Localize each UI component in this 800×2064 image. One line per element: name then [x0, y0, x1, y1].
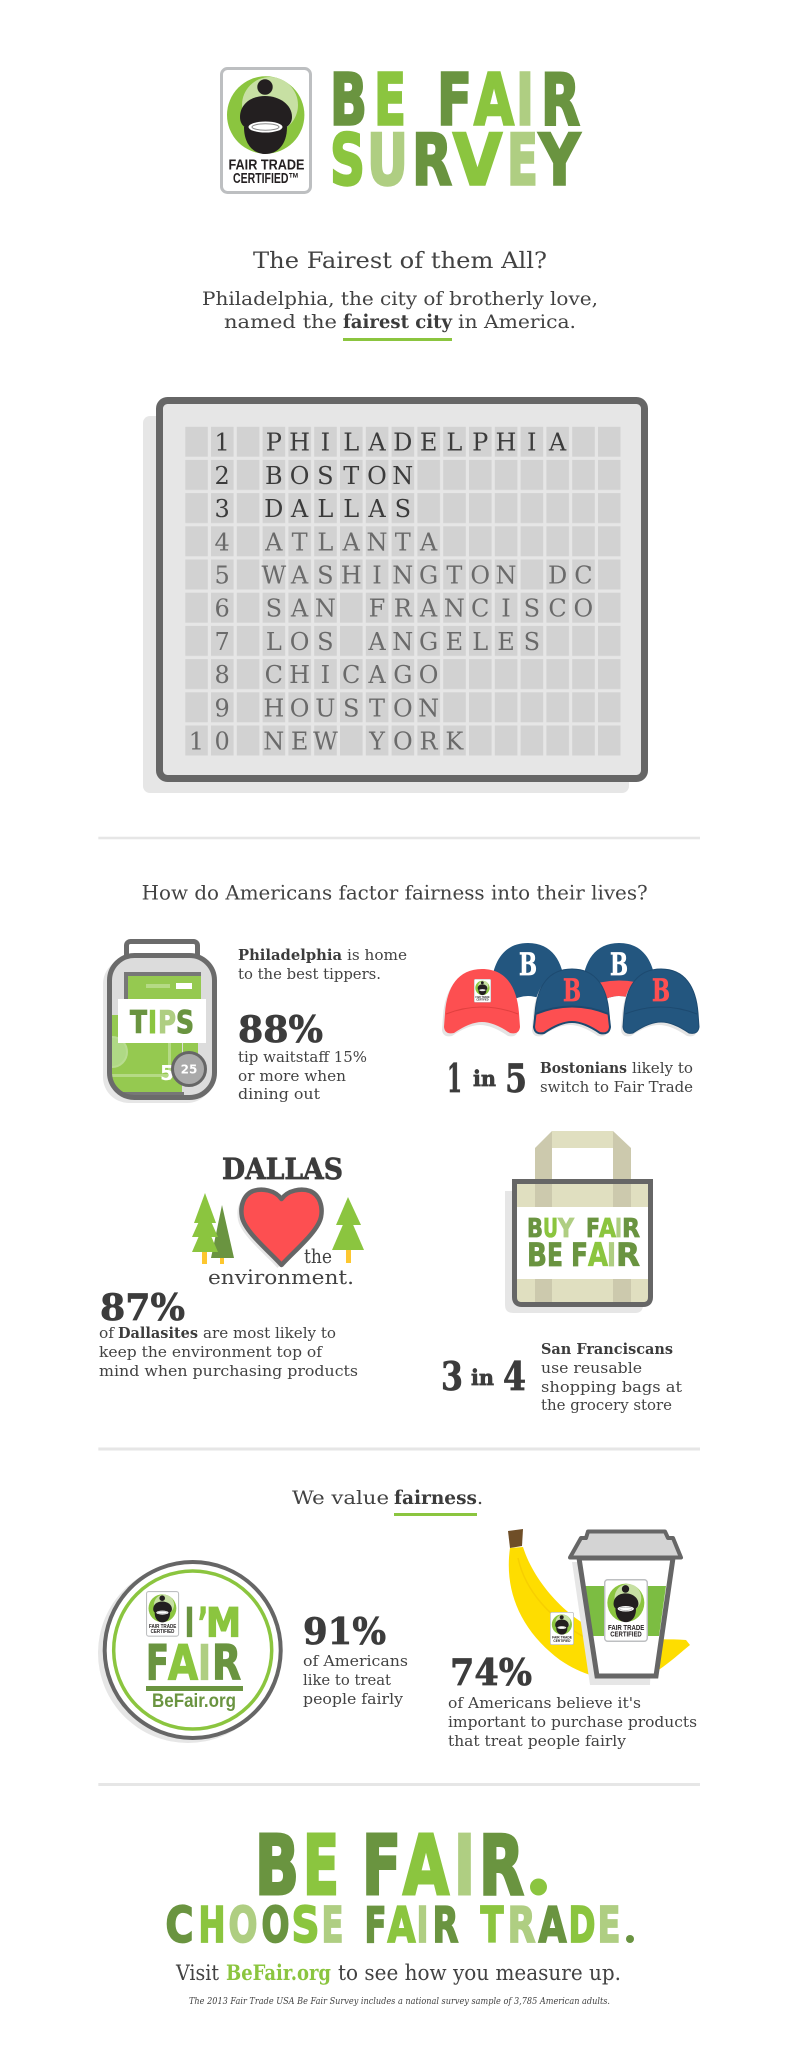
board rows: SAN FRANCISCO — [266, 595, 593, 623]
text: Philadelphia best tippers: to the best tippers. — [238, 965, 381, 983]
icon: tip jar: S — [176, 1005, 194, 1041]
heading: We value fairness: fairness — [394, 1487, 477, 1509]
text: of Americans like to treat — [303, 1652, 408, 1708]
panel: city ranking board — [143, 400, 644, 793]
board rows: 8 — [215, 661, 230, 689]
board rows: PHILADELPHIA — [266, 429, 567, 457]
slogan: Choose Fair Trade: I — [416, 1897, 428, 1954]
bag lettering: F — [571, 1236, 588, 1274]
text: Visit BeFair.org: to see how you measure up. — [338, 1961, 621, 1985]
bag lettering: E — [547, 1236, 563, 1274]
slogan: Choose Fair Trade: T — [480, 1897, 504, 1954]
logo: Fair Trade Certified: FAIR TRADE — [228, 158, 305, 174]
board rows: DALLAS — [264, 495, 411, 523]
heading: The Fairest of them All?: The Fairest of them All? — [253, 249, 547, 274]
bag lettering: Y — [557, 1214, 574, 1244]
slogan: Choose Fair Trade: R — [508, 1897, 536, 1954]
slogan: Choose Fair Trade: O — [228, 1897, 258, 1954]
text: of Americans like to treat: like to treat — [303, 1671, 391, 1689]
heading: We value fairness: . — [477, 1487, 483, 1509]
text: Philadelphia fairest city: in America. — [458, 311, 576, 333]
title: Be Fair Survey: B — [330, 58, 367, 142]
icon: baseball caps: B — [610, 947, 628, 983]
stat: 1 in 5: 1 — [447, 1056, 462, 1102]
text: of Americans believe — [448, 1694, 697, 1750]
text: of Americans believe: that treat people fairly — [448, 1732, 627, 1750]
text: Visit BeFair.org: Visit — [175, 1961, 220, 1985]
board rows — [189, 429, 593, 756]
text: San Franciscans — [541, 1340, 682, 1414]
text: Philadelphia fairest city: named the — [224, 311, 337, 333]
bag lettering: B — [527, 1236, 547, 1274]
icon: coffee cup: FAIR TRADE — [608, 1625, 645, 1632]
slogan: Be Fair: R — [479, 1819, 524, 1914]
heading: Dallas: DALLAS — [222, 1152, 343, 1186]
text: San Franciscans: San Franciscans — [541, 1340, 673, 1358]
board rows: 3 — [215, 495, 230, 523]
board rows: NEW YORK — [263, 728, 464, 756]
title: Be Fair Survey: A — [474, 58, 514, 142]
slogan: Be Fair: A — [403, 1819, 449, 1914]
heading: How do Americans factor fairness: How do Americans factor fairness into their lives? — [142, 881, 648, 904]
text: San Franciscans: the grocery store — [541, 1396, 672, 1414]
bag lettering: R — [622, 1214, 640, 1244]
stat: 3 in 4: 4 — [503, 1354, 526, 1400]
title: Be Fair Survey: V — [453, 120, 502, 202]
heading: We value fairness: We value — [292, 1487, 389, 1509]
stat: 1 in 5: 5 — [505, 1056, 527, 1102]
stat: 88%: 88% — [238, 1009, 323, 1051]
icon: I'm Fair badge: M — [206, 1600, 241, 1646]
icon: tip jar — [97, 942, 214, 1103]
text: Dallasites: of — [99, 1324, 115, 1342]
text: San Franciscans: use reusable — [541, 1359, 642, 1377]
icon: heart — [237, 1190, 322, 1268]
stat: 3 in 4: 3 — [441, 1354, 463, 1400]
text: Philadelphia best tippers — [238, 946, 407, 983]
board rows: CHICAGO — [265, 661, 438, 689]
footnote: The 2013 Fair Trade USA Be Fair Survey includes a national survey sample of 3,785 American adults. — [189, 1997, 610, 2007]
title: Be Fair Survey: E — [374, 58, 406, 142]
stat: 87%: 87% — [100, 1287, 185, 1329]
board rows: 9 — [215, 694, 230, 722]
slogan: Choose Fair Trade: F — [364, 1897, 386, 1954]
text: Bostonians — [540, 1059, 693, 1096]
slogan: Choose Fair Trade: A — [538, 1897, 567, 1954]
text: Visit BeFair.org: BeFair.org — [226, 1960, 331, 1985]
slogan: Be Fair: B — [255, 1819, 299, 1914]
stat: 91%: 91% — [303, 1611, 386, 1653]
text: of Americans like to treat: of Americans — [303, 1652, 408, 1670]
title: Be Fair Survey: E — [507, 120, 538, 202]
text: Dallasites: are most likely to — [203, 1324, 336, 1342]
text: Dallasites: Dallasites — [118, 1324, 198, 1342]
text: Dallasites: keep the environment top of — [99, 1343, 323, 1361]
stat: 1 in 5 — [447, 1056, 527, 1102]
board rows: 6 — [215, 595, 230, 623]
bag lettering: A — [599, 1214, 616, 1244]
title: Be Fair Survey: S — [330, 120, 365, 202]
icon: I'm Fair badge: I — [198, 1636, 211, 1692]
slogan: Choose Fair Trade: E — [598, 1897, 620, 1954]
icon: coffee cup: CERTIFIED — [610, 1631, 642, 1639]
slogan: Choose Fair Trade: O — [262, 1897, 290, 1954]
stat: 3 in 4 — [441, 1354, 526, 1400]
text: the environment: environment. — [208, 1265, 354, 1289]
icon: I'm Fair badge: I — [185, 1600, 194, 1646]
slogan: Choose Fair Trade: A — [388, 1897, 416, 1954]
text: Bostonians: likely to — [632, 1059, 693, 1077]
slogan: Be Fair: I — [454, 1819, 475, 1914]
title: Be Fair Survey: R — [541, 58, 580, 142]
text: the environment — [208, 1244, 354, 1289]
slogan: Choose Fair Trade: C — [166, 1897, 194, 1954]
icon: banana — [508, 1529, 690, 1680]
bag lettering: R — [616, 1236, 640, 1274]
board rows: ATLANTA — [264, 528, 438, 556]
text: tip waitstaff — [238, 1048, 367, 1103]
icon: I'm Fair badge: R — [212, 1636, 241, 1692]
icon: tip jar: 5 — [160, 1061, 174, 1085]
text: Philadelphia fairest city — [202, 288, 598, 341]
text: Bostonians: Bostonians — [540, 1059, 627, 1077]
icon: baseball caps: B — [652, 973, 670, 1009]
board rows: 7 — [215, 628, 230, 656]
icon: banana: CERTIFIED — [553, 1639, 571, 1643]
icon: tip jar: 25 — [181, 1062, 197, 1076]
title: Be Fair Survey — [330, 58, 581, 202]
bag lettering: A — [588, 1236, 608, 1274]
slogan: Be Fair: F — [362, 1819, 401, 1914]
icon: baseball caps — [442, 943, 699, 1036]
logo: Fair Trade Certified: CERTIFIED™ — [233, 171, 299, 187]
stat: 1 in 5: in — [473, 1066, 496, 1091]
text: the environment: the — [304, 1244, 332, 1268]
text: San Franciscans: shopping bags at — [541, 1378, 682, 1396]
slogan: Choose Fair Trade: E — [322, 1897, 344, 1954]
title: Be Fair Survey: I — [516, 58, 534, 142]
text: tip waitstaff: dining out — [238, 1085, 320, 1103]
bag lettering — [527, 1214, 640, 1274]
stat: 74%: 74% — [450, 1652, 532, 1694]
title: Be Fair Survey: U — [367, 120, 408, 202]
bag lettering: B — [527, 1214, 543, 1244]
text: of Americans believe: of Americans believe it's — [448, 1694, 641, 1712]
icon: I'm Fair badge — [98, 1562, 281, 1743]
icon: I'm Fair badge: F — [146, 1636, 169, 1692]
icon: banana: FAIR TRADE — [552, 1636, 572, 1640]
text: Philadelphia best tippers: is home — [347, 946, 407, 964]
board rows: 2 — [215, 462, 230, 490]
slogan: Choose Fair Trade: S — [292, 1897, 320, 1954]
bag lettering: I — [615, 1214, 622, 1244]
slogan: Choose Fair Trade — [166, 1897, 634, 1954]
icon: tote bag — [505, 1131, 650, 1313]
icon: I'm Fair badge: CERTIFIED — [151, 1629, 175, 1635]
board rows: WASHINGTON DC — [261, 562, 593, 590]
title: Be Fair Survey: Y — [538, 120, 581, 202]
slogan: Choose Fair Trade: R — [432, 1897, 458, 1954]
icon: tip jar: P — [158, 1005, 176, 1041]
title: Be Fair Survey: F — [437, 58, 472, 142]
icon: I'm Fair badge: A — [168, 1636, 198, 1692]
board rows: HOUSTON — [263, 694, 439, 722]
text: Dallasites: mind when purchasing products — [99, 1362, 358, 1380]
bag lettering: I — [607, 1236, 616, 1274]
text: Philadelphia fairest city: Philadelphia, the city of brotherly love, — [202, 288, 598, 310]
board rows: 4 — [215, 528, 230, 556]
slogan: Be Fair — [255, 1819, 547, 1914]
heading: We value fairness — [292, 1487, 483, 1516]
icon: baseball caps: CERTIFIED — [476, 997, 489, 1001]
board rows: 1 — [215, 429, 230, 457]
icon: baseball caps: B — [563, 973, 581, 1009]
text: tip waitstaff: tip waitstaff 15% — [238, 1048, 367, 1066]
icon: tip jar: T — [130, 1005, 147, 1041]
text: Philadelphia best tippers: Philadelphia — [238, 946, 342, 964]
title: Be Fair Survey: R — [412, 120, 452, 202]
stat: 3 in 4: in — [471, 1365, 494, 1390]
text: Philadelphia fairest city: fairest city — [343, 311, 453, 333]
icon: baseball caps: B — [519, 947, 537, 983]
text: Dallasites — [99, 1324, 358, 1380]
icon: baseball caps: FAIR TRADE — [476, 995, 490, 999]
text: Visit BeFair.org — [175, 1960, 621, 1985]
slogan: Choose Fair Trade: D — [568, 1897, 596, 1954]
text: of Americans believe: important to purchase products — [448, 1713, 697, 1731]
board rows: 5 — [215, 562, 230, 590]
icon: tip jar: I — [148, 1005, 157, 1041]
slogan: Be Fair: E — [303, 1819, 339, 1914]
text: of Americans like to treat: people fairly — [303, 1690, 404, 1708]
board rows: 10 — [189, 728, 230, 756]
text: tip waitstaff: or more when — [238, 1067, 346, 1085]
icon: coffee cup — [570, 1532, 681, 1685]
board rows: LOS ANGELES — [266, 628, 540, 656]
text: Bostonians: switch to Fair Trade — [540, 1078, 693, 1096]
board rows: BOSTON — [265, 462, 413, 490]
logo: Fair Trade Certified — [222, 68, 310, 192]
icon: I'm Fair badge: BeFair.org — [152, 1691, 236, 1712]
icon: I'm Fair badge: ’ — [198, 1600, 208, 1646]
icon: trees — [192, 1193, 364, 1264]
bag lettering: F — [586, 1214, 600, 1244]
slogan: Choose Fair Trade: H — [198, 1897, 226, 1954]
icon: I'm Fair badge: FAIR TRADE — [149, 1624, 177, 1630]
bag lettering: U — [543, 1214, 558, 1244]
